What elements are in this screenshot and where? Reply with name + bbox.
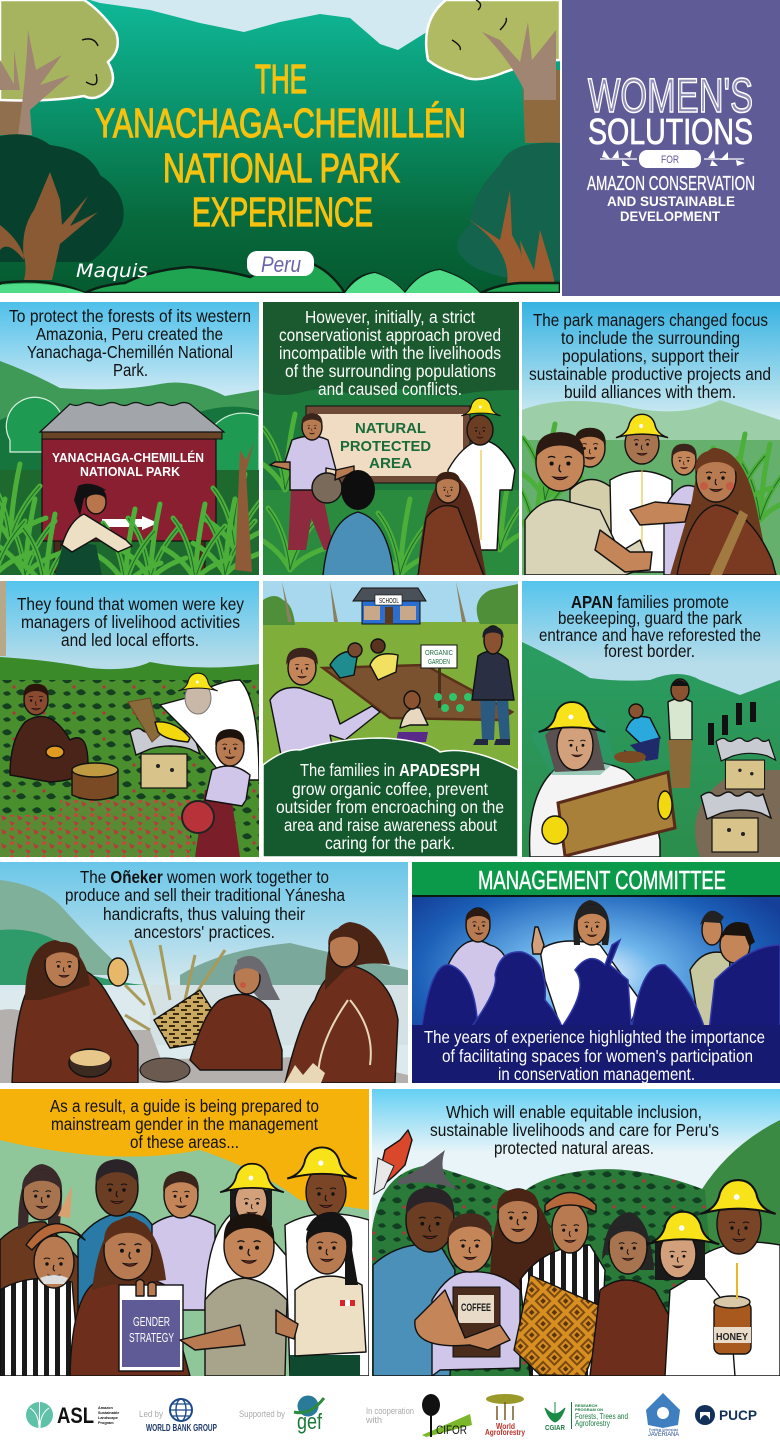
header illustration panel [0,0,560,293]
caption: managers of livelihood activities [21,612,240,632]
stump [72,763,118,800]
organic garden: ORGANIC [425,650,453,657]
caption [529,310,771,402]
plants [253,414,536,575]
panel: APAN [522,581,780,857]
caption: forest border. [604,641,695,661]
rangers [690,911,755,1030]
sign: AREA [369,455,412,472]
reforest workers [614,679,692,788]
sign: NATURAL [355,420,426,437]
top right tree [426,0,560,143]
basket [154,990,225,1048]
park sign [40,402,224,572]
caption: However, initially, a strict [305,307,475,327]
ranger two [569,428,610,530]
caption: handicrafts, thus valuing their [103,904,305,924]
CIFOR logo: CIFOR [436,1423,467,1437]
panel: APADESPH [263,581,518,857]
subtitle line 3: DEVELOPMENT [620,208,720,224]
park sign: YANACHAGA-CHEMILLÉN [52,450,204,465]
ASL logo: Amazon [98,1406,113,1410]
for badge [600,150,745,168]
cooperation label [365,1406,414,1425]
gender strategy tablet: GENDER [133,1314,170,1329]
woman with book [415,1213,520,1376]
arrow [102,516,158,530]
caption: ancestors' practices. [134,922,275,942]
CGIAR logo [545,1402,628,1432]
indigenous woman [70,1216,190,1376]
audience silhouettes [420,940,780,1040]
panel: alliances [503,302,780,576]
beekeeper man [448,398,515,560]
GEF logo: Supported by [239,1409,285,1419]
plants [0,442,259,575]
honey jar: HONEY [716,1332,748,1343]
sign: PROTECTED [340,438,431,455]
woman at left [445,908,512,1020]
caption: in conservation management. [498,1064,695,1084]
hive [130,728,200,788]
caption: conservationist approach proved [279,325,501,345]
caption: populations, support their [562,346,739,366]
gender strategy tablet: STRATEGY [129,1330,174,1345]
seedlings [708,702,756,745]
beekeeper man [695,1180,780,1376]
indigenous woman back [490,1189,555,1290]
caption: Which will enable equitable inclusion, [446,1102,702,1122]
Javeriana logo [646,1393,680,1438]
caption: of the surrounding populations [285,361,496,381]
country label: Peru [247,251,314,277]
caption [17,597,244,646]
bottom left tree [0,134,124,280]
ranger one [525,432,650,575]
top left tree [0,0,118,135]
woman harvesting [182,729,250,857]
panel: gender guide [0,1089,369,1376]
woman in cream [276,1212,366,1376]
honey jar [714,1263,751,1354]
caption: The families in APADESPH [300,760,480,780]
woven textile [514,1275,610,1376]
caption: APAN families promote [571,592,729,612]
text box [263,738,518,857]
school [353,588,426,624]
CGIAR logo: RESEARCH [575,1403,598,1408]
ranger woman [55,484,132,576]
caption [65,867,345,942]
caption [430,1102,719,1158]
World Agroforestry logo [485,1394,525,1437]
panel: women managers [0,581,259,857]
presenter [532,900,640,1040]
CGIAR logo: Agroforestry [575,1419,610,1428]
woman with book: COFFEE [461,1302,491,1314]
caption: mainstream gender in the management [51,1114,318,1134]
logo strip [26,1393,757,1438]
caption: Park. [113,360,148,380]
school: SCHOOL [379,598,399,605]
caption: and caused conflicts. [318,379,462,399]
World Agroforestry logo: World [496,1422,515,1431]
panel: park created [0,302,271,590]
Javeriana logo: Pontificia Universidad [649,1427,678,1432]
World Agroforestry logo: Agroforestry [485,1428,525,1437]
CIFOR logo [422,1394,472,1437]
GEF logo: gef [297,1409,323,1434]
caption: caring for the park. [325,833,455,853]
ASL logo [26,1402,119,1428]
caption: build alliances with them. [564,382,736,402]
boy from behind [323,470,394,576]
caption: grow organic coffee, prevent [292,779,488,799]
ASL logo: Sustainable [98,1411,119,1415]
beekeeper [128,673,259,780]
caption [9,306,251,380]
title: THE [255,56,307,102]
panel: Oñeker women [0,862,408,1083]
Javeriana logo: JAVERIANA [648,1432,679,1438]
navy text band [412,1025,780,1083]
organic garden: GARDEN [428,659,450,666]
title: YANACHAGA-CHEMILLÉN [95,100,466,146]
hives [701,738,776,852]
caption: area and raise awareness about [284,815,497,835]
PUCP logo [695,1405,757,1425]
park sign: NATIONAL PARK [80,464,181,479]
CGIAR logo: PROGRAM ON [575,1407,603,1412]
cooperation label: In cooperation [366,1406,414,1416]
caption: and led local efforts. [61,630,199,650]
woman lavender [664,444,700,575]
woman two [190,956,282,1070]
World Bank logo: Led by [139,1409,163,1419]
for badge: FOR [661,154,679,166]
subtitle line 2: AND SUSTAINABLE [607,193,735,209]
CGIAR logo: Forests, Trees and [575,1412,628,1421]
back row: beekeeper man [285,1147,369,1376]
woman in brown [590,1212,677,1376]
caption: To protect the forests of its western [9,306,251,326]
caption: The Oñeker women work together to [80,867,329,887]
bowl [140,1058,190,1082]
caption [50,1096,319,1152]
cooperation label: with [365,1415,382,1425]
title: EXPERIENCE [192,189,373,235]
sign [306,406,470,483]
panel: management committee [412,862,780,1084]
caption: to include the surrounding [561,328,740,348]
series title panel [562,0,780,296]
handshakes [595,502,690,572]
caption: Yanachaga-Chemillén National [27,342,233,362]
back row: woman lavender [152,1172,215,1310]
children gardening [330,639,428,742]
rocks [0,1009,408,1083]
caption: produce and sell their traditional Yánesha [65,885,345,905]
sky [90,0,450,50]
organic garden [323,645,512,720]
woman with basket [270,414,354,550]
seated woman [10,684,88,782]
World Bank logo: WORLD BANK GROUP [146,1423,217,1434]
caption [276,760,504,853]
caption [424,1027,765,1084]
caption: beekeeping, guard the park [558,608,742,628]
caption: protected natural areas. [494,1138,654,1158]
country label: Peru: Peru [261,252,301,277]
woman three [285,922,398,1083]
reeds [125,940,225,1030]
ASL logo: Program [98,1421,114,1425]
plants [522,422,780,528]
man in blue [373,1188,455,1376]
gender strategy tablet [119,1280,183,1371]
ASL logo: Landscape [98,1416,118,1420]
indigenous elder [0,1186,85,1376]
panel: conflicts [253,302,536,576]
signature: Maquis [76,260,148,282]
teacher [472,626,514,745]
bushes [0,263,560,293]
World Bank logo [139,1399,217,1434]
back row: beekeeper woman [205,1164,300,1320]
beekeeper woman [647,1212,735,1376]
indigenous woman [670,448,776,575]
caption: outsider from encroaching on the [276,797,504,817]
panel: equitable inclusion [372,1089,780,1376]
back row: man [78,1160,160,1376]
caption: of these areas... [130,1132,239,1152]
beekeeper [610,414,672,572]
title: NATIONAL PARK [163,145,400,191]
caption: Amazonia, Peru created the [36,324,223,344]
caption: incompatible with the livelihoods [279,343,501,363]
PUCP logo: PUCP [719,1408,757,1423]
title [95,56,466,235]
elder in poncho [520,1192,605,1376]
caption: They found that women were key [17,594,244,614]
ranger [180,1214,287,1376]
caption [279,307,501,399]
CGIAR logo: CGIAR [545,1425,565,1432]
woman speaking [270,648,380,760]
beekeeper woman [530,702,675,857]
caption [539,592,761,661]
GEF logo [239,1396,324,1434]
ASL logo: ASL [57,1403,94,1428]
bottom right tree [457,143,560,290]
indigenous woman [418,472,486,576]
bird [374,1130,465,1194]
back row: woman left [0,1164,80,1376]
caption: As a result, a guide is being prepared to [50,1096,319,1116]
caption: sustainable livelihoods and care for Peru's [430,1120,719,1140]
woman one [12,940,138,1083]
